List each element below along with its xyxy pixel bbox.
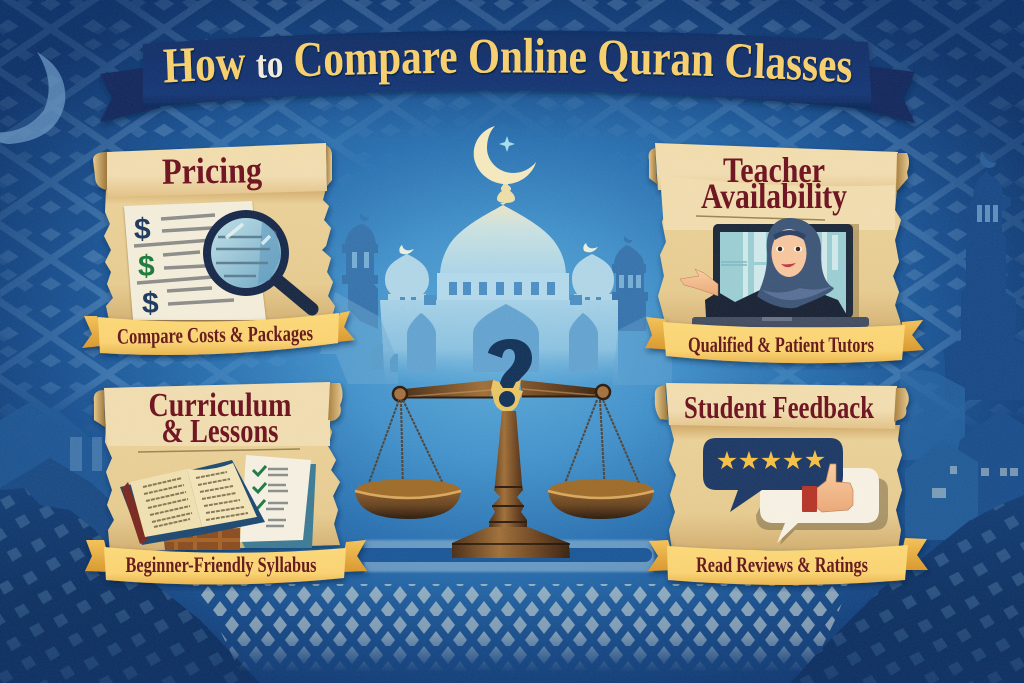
white speech bubble: [756, 468, 888, 545]
rating stars: ★: [782, 446, 804, 475]
robe: [705, 290, 848, 317]
left chains: [366, 400, 446, 492]
eyes and smile: [776, 246, 802, 267]
hand: [680, 269, 718, 296]
icon: review bubbles, stars and thumbs up: [703, 438, 888, 545]
top roll: [666, 383, 897, 429]
parchment body: [669, 425, 902, 550]
column: [489, 411, 527, 527]
rating stars: ★: [760, 446, 782, 475]
heading: Student Feedback: [684, 389, 874, 425]
top roll: [655, 143, 898, 195]
crescent and star: [474, 126, 536, 184]
panel: curriculum and lessons: [85, 382, 367, 585]
book covers: [120, 460, 265, 545]
balance scale with question mark: [355, 339, 654, 558]
book pages: [130, 469, 202, 537]
ribbon caption: Compare Costs & Packages: [117, 320, 314, 349]
ribbon: [645, 317, 924, 363]
right chains: [562, 400, 642, 492]
thumbs up: [802, 464, 853, 512]
left minaret: [342, 213, 378, 329]
book text lines: [143, 472, 248, 527]
rating stars: [716, 445, 826, 475]
hijab: [757, 218, 834, 308]
rating stars: ★: [738, 446, 760, 475]
question mark: [488, 339, 532, 392]
illustration: teacher on laptop: [680, 218, 869, 327]
ribbon: [85, 540, 367, 585]
heading: Pricing: [162, 150, 263, 193]
bottom dark scale pattern left: [0, 488, 260, 683]
heading: Teacher: [723, 150, 825, 190]
side domes: [385, 243, 614, 310]
icon: faint crescent moon top left: [0, 52, 65, 144]
parchment body: [104, 188, 335, 325]
parchment body: [105, 425, 340, 552]
ribbon: [648, 538, 928, 585]
icon: price list with magnifying glass: [124, 201, 312, 320]
checklist: [240, 455, 316, 548]
top roll: [105, 143, 327, 197]
magnifier: [203, 210, 312, 309]
bottom dark scale pattern right: [790, 495, 1024, 683]
ribbon caption: Qualified & Patient Tutors: [688, 332, 874, 357]
heading line 2: & Lessons: [162, 413, 278, 450]
panel: student feedback: [648, 383, 928, 585]
left background silhouettes: [0, 402, 110, 540]
mosque illustration: [320, 126, 672, 385]
right pan: [548, 479, 654, 519]
right minaret: [612, 236, 648, 331]
dollar signs: $: [142, 287, 159, 320]
mosque arches: [473, 304, 539, 372]
ribbon caption: Beginner-Friendly Syllabus: [126, 552, 317, 577]
base: [452, 527, 570, 558]
mosque base: [380, 300, 618, 382]
rating stars: ★: [716, 446, 738, 475]
heading line 2: Availability: [701, 176, 847, 216]
scale beam: [393, 380, 610, 412]
illustration: book and checklist: [120, 455, 316, 550]
dollar signs: [134, 213, 159, 320]
floor shadow under scales: [358, 540, 654, 572]
ribbon: [82, 311, 355, 355]
title banner: [100, 30, 916, 127]
face: [772, 229, 806, 277]
right background houses: [900, 370, 1024, 540]
table: [163, 528, 240, 550]
navy speech bubble: [703, 438, 843, 512]
right background minaret silhouette: [943, 152, 1024, 400]
rating stars: ★: [804, 445, 826, 474]
dollar signs: $: [138, 250, 155, 283]
top roll: [104, 382, 330, 437]
heading: Curriculum: [148, 387, 292, 424]
ribbon tails: [100, 66, 915, 123]
panel: teacher availability: [645, 143, 924, 363]
title: How to Compare Online Quran Classes: [163, 38, 852, 86]
laptop base: [692, 317, 869, 327]
decorative diamond tiles: [192, 584, 848, 669]
parchment body: [658, 188, 903, 335]
ribbon caption: Read Reviews & Ratings: [696, 552, 868, 577]
upper parchment fill: [660, 175, 895, 230]
panel: pricing: [82, 143, 355, 355]
dollar signs: $: [134, 213, 151, 246]
left pan: [355, 479, 461, 519]
main dome: [440, 203, 566, 277]
